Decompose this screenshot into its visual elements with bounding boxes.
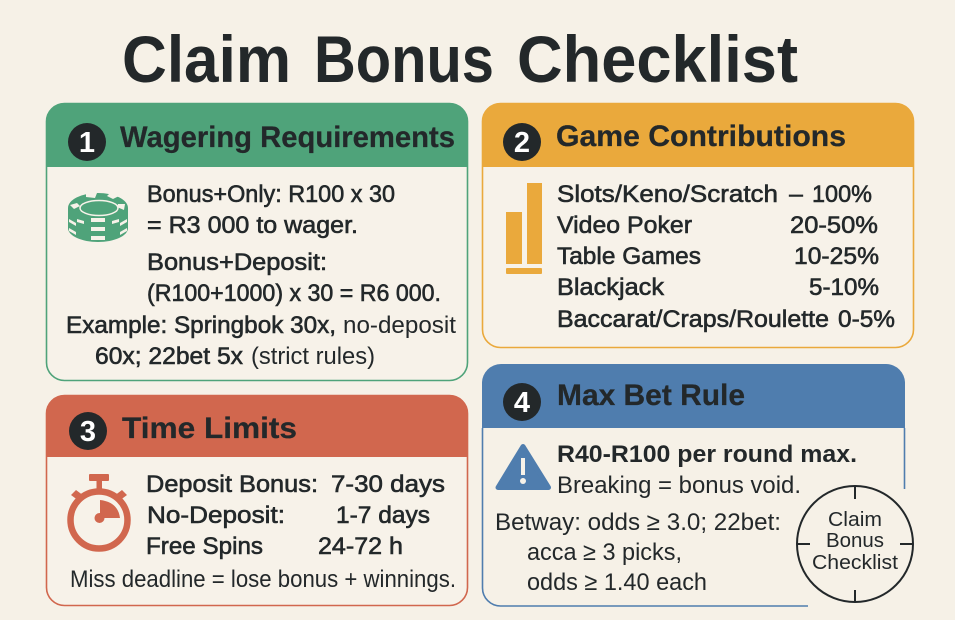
text block: wagering calculations: (strict rules) <box>251 343 375 370</box>
badge 1: 1 <box>79 127 95 159</box>
panel: game contributions <box>482 103 914 348</box>
badge 3 <box>69 412 107 450</box>
stamp: claim bonus checklist: Bonus <box>826 530 884 552</box>
text block: time limit durations: No-Deposit: <box>147 502 285 529</box>
title <box>122 22 798 96</box>
stamp: claim bonus checklist: Checklist <box>812 552 898 574</box>
text block: wagering calculations: Example: Springbok 30x, <box>66 312 336 339</box>
panel: wagering requirements <box>46 103 468 380</box>
text block: time limit durations: Miss deadline = lose bonus + winnings. <box>70 566 456 593</box>
badge 3: 3 <box>80 416 96 448</box>
icon: bar chart <box>506 183 542 274</box>
heading: game contributions: Game Contributions <box>556 120 846 153</box>
stamp: claim bonus checklist <box>797 486 913 602</box>
text block: time limit durations: 1-7 days <box>336 502 430 529</box>
heading: time limits: Time Limits <box>122 412 297 445</box>
text block: contribution percentages: 0-5% <box>838 306 895 333</box>
badge 1 <box>68 123 106 161</box>
text block: max bet limits: Breaking = bonus void. <box>557 472 801 499</box>
text block: contribution percentages: Table Games <box>557 243 701 270</box>
text block: wagering calculations <box>66 181 456 370</box>
title: Checklist <box>517 22 798 96</box>
text block: contribution percentages: Video Poker <box>557 212 692 239</box>
text block: time limit durations: Deposit Bonus: <box>146 471 318 498</box>
badge 4: 4 <box>514 387 530 419</box>
text block: time limit durations: 24-72 h <box>318 533 403 560</box>
text block: contribution percentages <box>557 181 895 333</box>
text block: time limit durations <box>70 471 456 593</box>
panel: max bet rule <box>482 364 905 606</box>
text block: contribution percentages: 20-50% <box>790 212 878 239</box>
text block: time limit durations: 7-30 days <box>331 471 445 498</box>
heading: wagering requirements: Wagering Requirements <box>120 121 455 154</box>
text block: wagering calculations: no-deposit <box>343 312 456 339</box>
text block: max bet limits: Betway: odds ≥ 3.0; 22bet: <box>495 509 781 536</box>
text block: max bet limits: R40-R100 per round max. <box>557 441 857 468</box>
icon: warning triangle <box>498 446 548 488</box>
text block: contribution percentages: Blackjack <box>557 274 665 301</box>
badge 2: 2 <box>514 127 530 159</box>
text block: contribution percentages: 10-25% <box>794 243 879 270</box>
text block: wagering calculations: 60x; 22bet 5x <box>95 343 243 370</box>
icon: chip stack <box>68 193 128 242</box>
text block: wagering calculations: (R100+1000) x 30 = R6 000. <box>147 280 441 307</box>
text block: max bet limits: acca ≥ 3 picks, <box>527 539 682 566</box>
text block: contribution percentages: 5-10% <box>809 274 879 301</box>
text block: wagering calculations: Bonus+Only: R100 x 30 <box>147 181 395 208</box>
text block: contribution percentages: 100% <box>812 181 872 208</box>
title: Bonus <box>314 22 494 96</box>
heading: max bet rule: Max Bet Rule <box>557 379 745 412</box>
badge 2 <box>503 123 541 161</box>
text block: max bet limits <box>495 441 857 596</box>
icon: stopwatch <box>70 474 128 548</box>
title: Claim <box>122 22 291 96</box>
text block: wagering calculations: = R3 000 to wager. <box>147 212 358 239</box>
panel: time limits <box>46 395 468 606</box>
text block: contribution percentages: — <box>789 181 803 208</box>
text block: wagering calculations: Bonus+Deposit: <box>147 249 327 276</box>
text block: max bet limits: odds ≥ 1.40 each <box>527 569 707 596</box>
badge 4 <box>503 383 541 421</box>
stamp: claim bonus checklist: Claim <box>828 509 882 531</box>
text block: time limit durations: Free Spins <box>146 533 263 560</box>
text block: contribution percentages: Slots/Keno/Scratch <box>557 181 778 208</box>
text block: contribution percentages: Baccarat/Craps/Roulette <box>557 306 829 333</box>
